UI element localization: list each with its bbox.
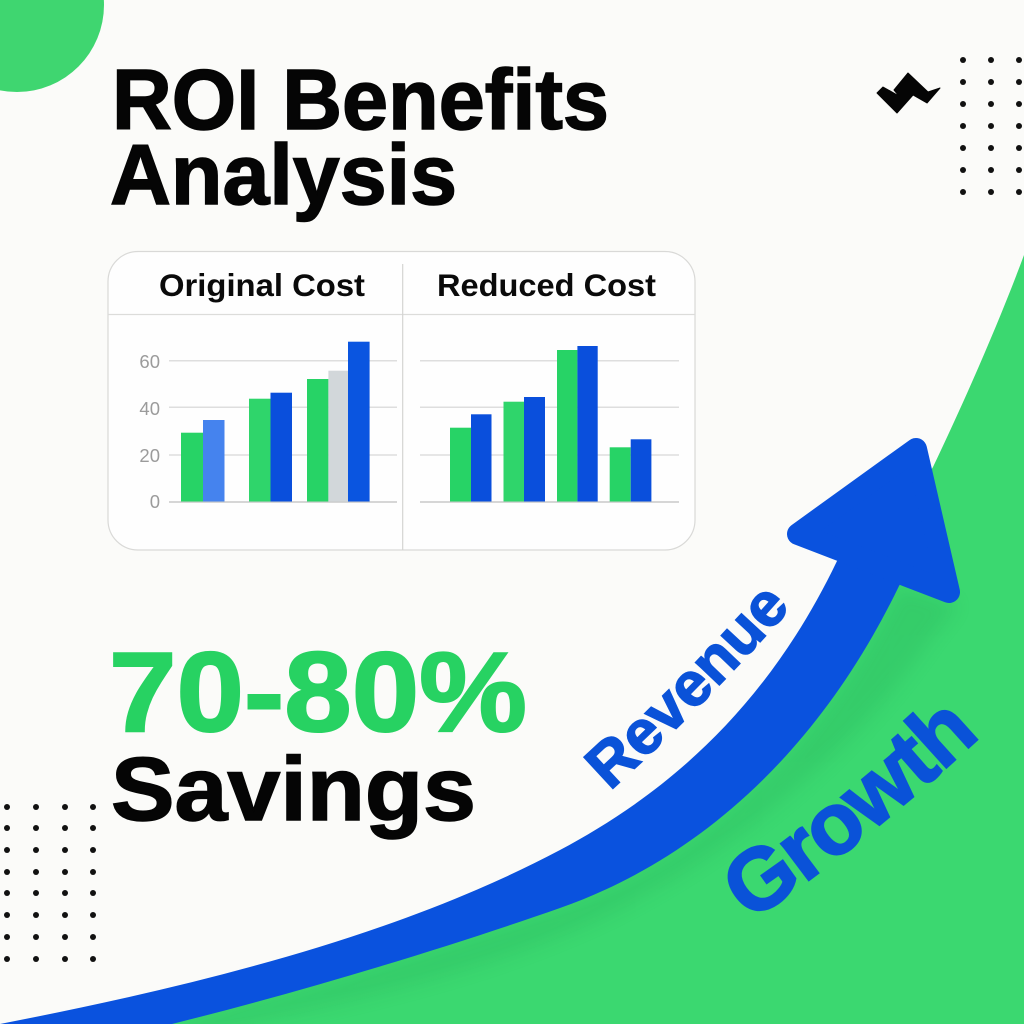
arrow shaft [0, 530, 925, 1024]
corner circle [0, 0, 104, 92]
axis labels: 60 [139, 351, 160, 372]
bar chart: original cost [139, 342, 397, 512]
statistic label: savings: Savings [111, 740, 476, 840]
title: ROI Benefits [112, 53, 609, 148]
axis labels: 0 [150, 491, 160, 512]
title: Analysis [110, 128, 457, 223]
heading: reduced cost: Reduced Cost [437, 267, 657, 303]
dot pattern top right [960, 57, 1022, 195]
dot pattern bottom left [4, 804, 96, 962]
icon: logo mark [877, 73, 940, 113]
panel: cost comparison table [108, 252, 695, 550]
axis labels [139, 351, 160, 512]
axis labels: 20 [139, 445, 160, 466]
statistic: 70-80%: 70-80% [109, 629, 527, 755]
axis labels: 40 [139, 398, 160, 419]
bar chart: reduced cost [420, 346, 679, 502]
label: revenue: Revenue [583, 592, 786, 790]
heading: original cost: Original Cost [159, 267, 366, 303]
label: growth: Growth [728, 710, 979, 912]
title [110, 53, 609, 223]
arrow head [798, 449, 949, 592]
green growth area [100, 255, 1024, 1024]
arrow: revenue growth [0, 449, 949, 1024]
